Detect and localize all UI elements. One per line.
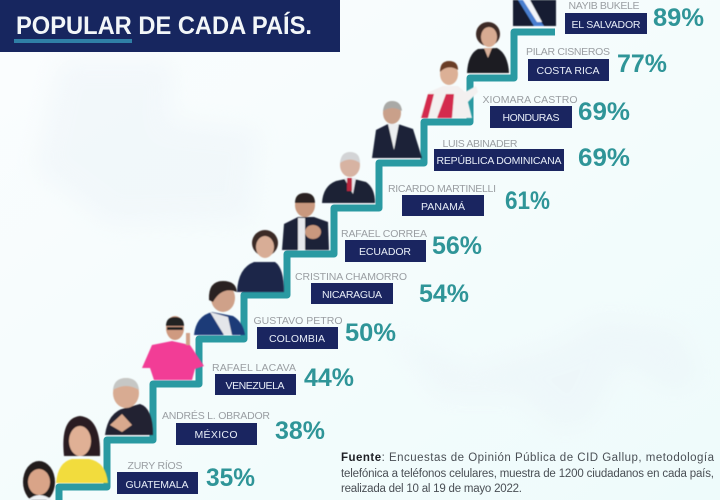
entry: Panamá <box>388 183 550 216</box>
person: Rafael Correa <box>282 193 329 250</box>
entry: Costa Rica: PILAR CISNEROS <box>526 46 610 58</box>
entry: Venezuela: VENEZUELA <box>226 380 284 392</box>
entry: Ecuador: 56% <box>432 232 482 260</box>
entry: México <box>162 409 325 445</box>
person: Cristina Chamorro <box>237 230 284 292</box>
entry: Colombia: GUSTAVO PETRO <box>254 315 342 327</box>
entry: El Salvador <box>565 0 704 34</box>
entry: El Salvador: EL SALVADOR <box>572 19 641 31</box>
entry: Guatemala: GUATEMALA <box>126 479 188 491</box>
entry: Honduras: XIOMARA CASTRO <box>482 94 578 106</box>
entry: República Dominicana: REPÚBLICA DOMINICANA <box>436 154 562 167</box>
entry: Honduras <box>482 94 630 128</box>
entry: República Dominicana: LUIS ABINADER <box>442 138 518 150</box>
person: Rafael Lacava <box>142 316 204 380</box>
entry: Ecuador <box>341 228 482 262</box>
entry: Panamá: RICARDO MARTINELLI <box>388 183 496 195</box>
person: Zury Ríos <box>56 416 108 483</box>
entry: Nicaragua: 54% <box>419 280 469 308</box>
person: Nayib Bukele <box>513 0 556 26</box>
person: Xiomara Castro <box>420 61 478 118</box>
entry: El Salvador: 89% <box>653 4 704 32</box>
entry: Guatemala: ZURY RÍOS <box>128 459 182 472</box>
source note: Fuente: Encuestas de Opinión Pública de CID Gallup, metodología <box>341 452 715 464</box>
person: Luis Abinader <box>372 101 422 158</box>
entry: República Dominicana <box>434 138 630 172</box>
entry: México: ANDRÉS L. OBRADOR <box>162 409 270 422</box>
entry: Venezuela: 44% <box>304 364 354 392</box>
entry: Honduras: 69% <box>578 98 630 126</box>
entry: Nicaragua <box>295 271 469 308</box>
entry: Ecuador: ECUADOR <box>359 246 411 258</box>
entry: Venezuela <box>212 362 354 395</box>
entry: Guatemala <box>117 459 255 494</box>
entry: El Salvador: NAYIB BUKELE <box>568 0 640 12</box>
entry: México: MÉXICO <box>194 428 238 441</box>
entry: Colombia: 50% <box>345 319 396 347</box>
entry: Guatemala: 35% <box>206 464 255 492</box>
entry: Costa Rica <box>526 46 667 81</box>
background map silhouette <box>35 60 700 430</box>
entry: Costa Rica: COSTA RICA <box>536 65 600 77</box>
staircase <box>59 32 555 500</box>
title underline <box>14 39 132 43</box>
source note: telefónica a teléfonos celulares, muestra de 1200 ciudadanos en cada país, <box>341 468 714 480</box>
title: POPULAR DE CADA PAÍS. <box>16 11 312 40</box>
source note <box>341 452 715 495</box>
entry: Colombia <box>254 315 396 349</box>
entry: Costa Rica: 77% <box>617 50 667 78</box>
entry: México: 38% <box>275 417 325 445</box>
entry: Ecuador: RAFAEL CORREA <box>341 228 427 240</box>
person: Ricardo Martinelli <box>322 152 375 203</box>
entry: República Dominicana: 69% <box>578 144 630 172</box>
entry: Colombia: COLOMBIA <box>269 333 325 345</box>
entry: Nicaragua: NICARAGUA <box>322 289 382 301</box>
person: Pilar Cisneros <box>467 22 509 73</box>
source note: realizada del 10 al 19 de mayo 2022. <box>341 483 522 495</box>
entry: Venezuela: RAFAEL LACAVA <box>212 362 296 374</box>
title banner <box>0 0 340 52</box>
entry: Nicaragua: CRISTINA CHAMORRO <box>295 271 407 283</box>
entry: Honduras: HONDURAS <box>502 112 560 124</box>
person: Keiko <box>23 461 55 500</box>
entry: Panamá: PANAMÁ <box>421 200 465 213</box>
person: Andrés L. Obrador <box>105 378 153 435</box>
entry: Panamá: 61% <box>505 187 550 215</box>
person: Gustavo Petro <box>194 281 245 335</box>
